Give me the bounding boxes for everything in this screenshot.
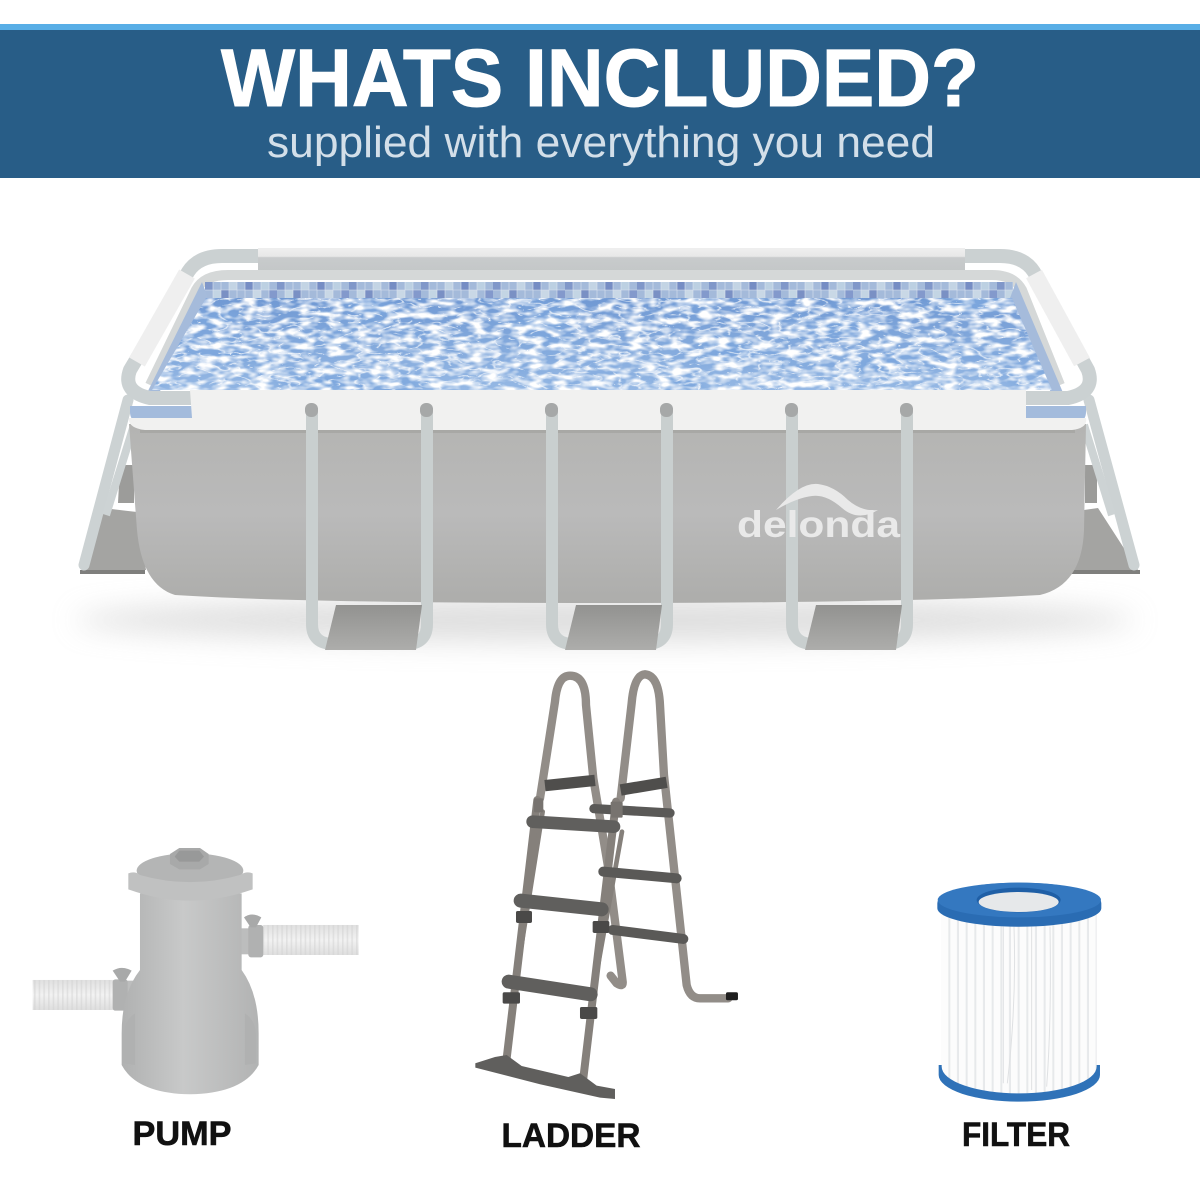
back rim (150, 275, 1060, 385)
base bar (475, 1055, 615, 1099)
pump (33, 848, 359, 1094)
ladder label: LADDER (502, 1117, 640, 1155)
foot caps (726, 992, 738, 1000)
centre pleats (1003, 927, 1050, 1090)
accent stripe (0, 24, 1200, 30)
front steps (509, 822, 614, 994)
liner corner right (1026, 406, 1086, 424)
ladder (475, 674, 738, 1099)
right connector (238, 914, 263, 957)
left connector (113, 968, 139, 1011)
lid knob (170, 848, 209, 869)
header background (0, 30, 1200, 178)
mosaic liner right (1010, 282, 1064, 395)
title: WHATS INCLUDED? (221, 33, 979, 124)
pool body (129, 424, 1086, 603)
lid ring (128, 872, 253, 901)
left A-frame support (80, 400, 146, 574)
pleated body (942, 912, 1097, 1093)
back tubes (540, 674, 728, 998)
white top band (129, 390, 1086, 430)
ground shadow (75, 598, 1135, 642)
band shadow (140, 430, 1075, 433)
pump label: PUMP (132, 1115, 232, 1153)
pump housing (122, 893, 259, 1094)
left frame sleeve (137, 274, 187, 362)
left U-leg step (305, 403, 433, 650)
lid top (137, 853, 243, 888)
right frame sleeve (1034, 274, 1082, 362)
filter label: FILTER (962, 1116, 1070, 1154)
left frame tube (128, 256, 258, 398)
left hose (33, 980, 114, 1010)
header band (0, 24, 1200, 178)
liner corner left (130, 406, 192, 424)
right U-leg step (785, 403, 913, 650)
pool (75, 248, 1140, 650)
mosaic liner left (146, 282, 208, 395)
subtitle: supplied with everything you need (267, 118, 935, 167)
brand logo (737, 484, 900, 545)
right hose (263, 925, 359, 955)
logo wave (776, 484, 878, 516)
right frame tube (965, 256, 1090, 398)
top braces (545, 780, 667, 790)
mosaic liner back (205, 282, 1013, 299)
filter (937, 883, 1101, 1102)
center U-leg step (545, 403, 673, 650)
water (150, 296, 1055, 392)
bottom blue ring (939, 1065, 1100, 1102)
top blue cap (937, 883, 1101, 927)
filter opening (977, 888, 1061, 912)
back rail (258, 248, 965, 271)
clamps (503, 798, 623, 1019)
logo text: delonda (737, 504, 900, 545)
back steps (594, 809, 683, 939)
right A-frame support (1060, 400, 1140, 574)
housing ribs (124, 1013, 256, 1065)
front tubes (507, 800, 622, 1078)
